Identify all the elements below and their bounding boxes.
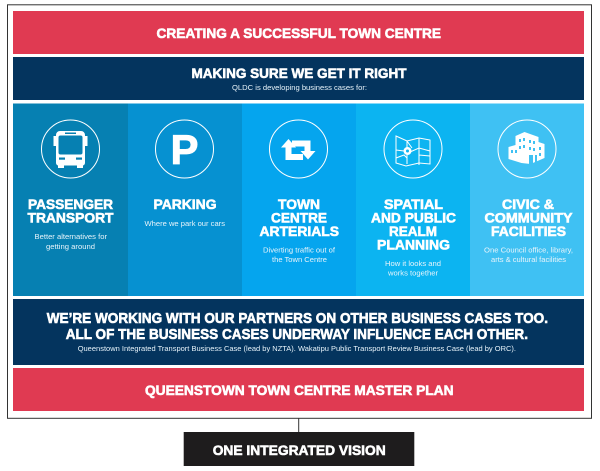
panel: passenger transport: getting around	[46, 242, 95, 251]
panel: spatial and public realm planning: SPATIAL	[384, 196, 443, 212]
panel: passenger transport: PASSENGER	[28, 196, 113, 212]
icon: bus	[42, 120, 100, 178]
panel: town centre arterials: Diverting traffic out of	[263, 246, 336, 254]
panel: parking	[128, 104, 242, 296]
panel: town centre arterials	[242, 104, 356, 296]
panel: passenger transport: TRANSPORT	[28, 210, 114, 226]
banner: making sure we get it right: QLDC is developing business cases for:	[232, 83, 367, 92]
panel: civic and community facilities: COMMUNITY	[484, 210, 573, 226]
panel: spatial and public realm planning: REALM	[389, 223, 437, 239]
banner: queenstown town centre master plan	[13, 368, 584, 411]
panel: town centre arterials: the Town Centre	[272, 255, 327, 264]
icon: map	[384, 120, 442, 178]
icon: parking	[156, 120, 214, 178]
icon: parking: P	[170, 126, 199, 173]
panel: spatial and public realm planning: works together	[387, 268, 438, 278]
banner: working with partners: WE’RE WORKING WITH OUR PARTNERS ON OTHER BUSINESS CASES TOO.	[47, 311, 548, 327]
panel: spatial and public realm planning: AND PUBLIC	[371, 210, 456, 226]
icon: building	[498, 120, 556, 178]
panel: civic and community facilities: CIVIC &	[502, 196, 554, 212]
panel: town centre arterials: ARTERIALS	[260, 223, 339, 239]
banner: queenstown town centre master plan: QUEENSTOWN TOWN CENTRE MASTER PLAN	[145, 382, 454, 398]
panel: town centre arterials: CENTRE	[271, 210, 327, 226]
banner: creating a successful town centre	[13, 11, 584, 54]
box: one integrated vision	[184, 432, 414, 466]
box: one integrated vision: ONE INTEGRATED VISION	[213, 442, 386, 458]
panel: spatial and public realm planning: How it looks and	[385, 259, 441, 268]
panel: parking: Where we park our cars	[144, 219, 225, 228]
panel: passenger transport: Better alternatives for	[34, 232, 107, 241]
banner: creating a successful town centre: CREATING A SUCCESSFUL TOWN CENTRE	[156, 25, 441, 41]
banner: making sure we get it right	[13, 57, 584, 100]
panel: civic and community facilities: FACILITIES	[491, 223, 566, 239]
connector line	[298, 418, 300, 432]
panel: civic and community facilities: arts & cultural facilities	[491, 255, 566, 264]
icon: arrows	[270, 120, 328, 178]
banner: working with partners	[13, 299, 584, 365]
panel: spatial and public realm planning	[356, 104, 470, 296]
panel: town centre arterials: TOWN	[278, 196, 320, 212]
banner: making sure we get it right: MAKING SURE WE GET IT RIGHT	[192, 65, 407, 81]
banner: working with partners: Queenstown Integrated Transport Business Case (lead by NZTA). Wakatipu Public Transport Review Business Case (lead by ORC).	[78, 344, 516, 353]
panel: civic and community facilities: One Council office, library,	[484, 246, 573, 254]
banner: working with partners: ALL OF THE BUSINESS CASES UNDERWAY INFLUENCE EACH OTHER.	[66, 327, 528, 343]
panel: passenger transport	[13, 104, 128, 296]
panel: spatial and public realm planning: PLANNING	[377, 236, 450, 252]
panel: civic and community facilities	[470, 104, 584, 296]
panel: parking: PARKING	[154, 196, 217, 212]
